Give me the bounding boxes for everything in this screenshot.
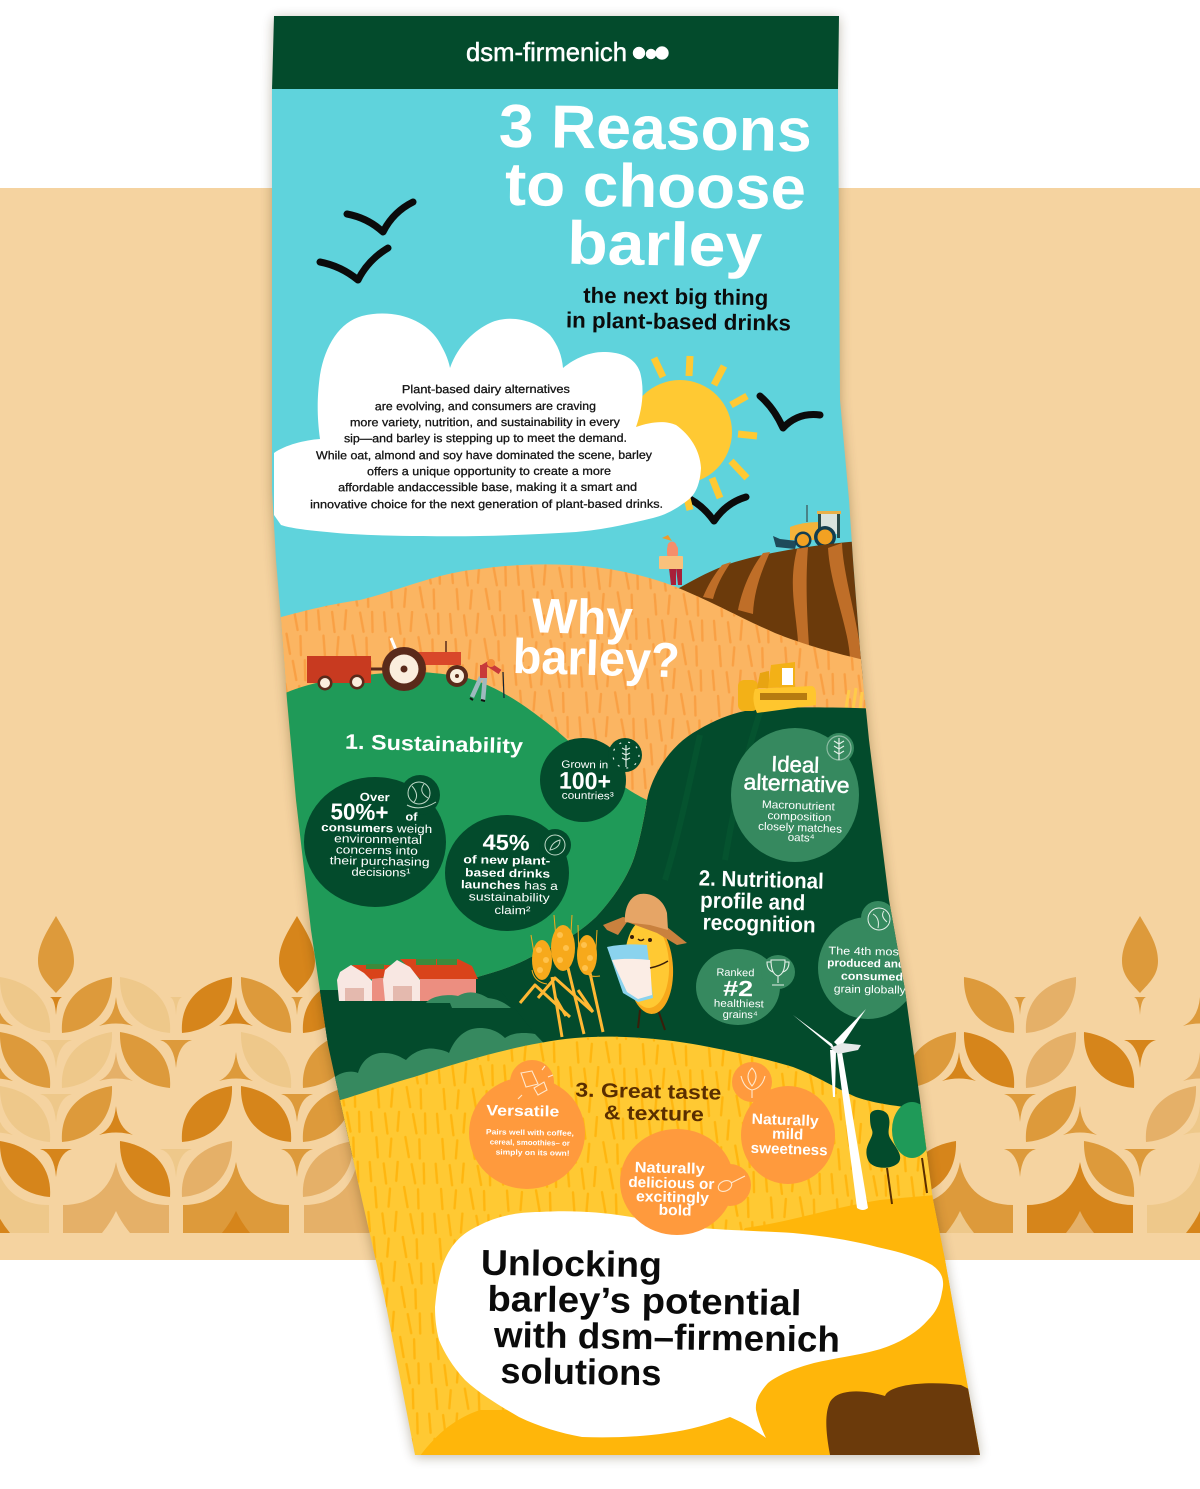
bubble text (750, 1111, 829, 1159)
icon: spoon (717, 1176, 745, 1193)
stat text: produced and (827, 957, 905, 971)
stat text: Grown in (561, 759, 609, 771)
shrubs by barn (426, 992, 511, 1008)
bubble text: mild (772, 1125, 803, 1144)
cloud with intro text (274, 313, 701, 536)
intro paragraph: Plant-based dairy alternatives (402, 384, 570, 396)
wheat tufts (846, 688, 868, 712)
subtitle (567, 286, 790, 332)
versatile text: Pairs well with coffee, (486, 1127, 574, 1138)
heading: 3. great taste and texture (575, 1079, 722, 1127)
versatile text: Versatile (486, 1102, 559, 1121)
character: barley grain with milk (603, 894, 687, 1030)
icon: farmer with crate (659, 535, 683, 585)
dark green hill (320, 707, 928, 1160)
icon: plant (741, 1068, 765, 1098)
subtitle: the next big thing (583, 283, 768, 310)
orange hill (270, 564, 900, 900)
icon: birds (320, 202, 820, 521)
icon: red tractor with trailer (307, 638, 468, 691)
stat text: oats⁴ (787, 832, 815, 845)
header bar (272, 16, 839, 89)
stat text: composition (767, 810, 832, 824)
intro paragraph: more variety, nutrition, and sustainability in every (350, 417, 620, 429)
bubble text: Naturally (634, 1159, 706, 1178)
stat text: Over (360, 792, 390, 804)
stat bubble: 100+ (540, 738, 642, 822)
closing message: barley’s potential (487, 1278, 802, 1323)
stat bubble: ideal alternative (731, 728, 859, 862)
green hill (270, 672, 647, 993)
stat text: countries³ (562, 790, 614, 803)
icon: wheat ear (827, 736, 851, 760)
icon: grain arrows (613, 742, 639, 768)
closing message: solutions (500, 1350, 662, 1393)
icon: globe in hand (407, 782, 436, 808)
stat text: grain globally (834, 983, 906, 997)
stat bubble: ranked #2 (696, 949, 795, 1025)
icon: trees (866, 1102, 932, 1204)
stat text: 45% (482, 830, 530, 855)
icon: yellow tractor (773, 505, 841, 549)
speech bubble (435, 1211, 943, 1438)
stat text: closely matches (758, 821, 843, 836)
bubble text: Naturally (751, 1111, 820, 1130)
title: to choose (505, 150, 807, 222)
icon: leaf (545, 835, 565, 855)
dark hill subtle stripes (665, 712, 760, 880)
bubble: naturally delicious (620, 1129, 751, 1235)
stat text: consumed (841, 971, 903, 984)
intro paragraph: offers a unique opportunity to create a more (367, 466, 611, 478)
closing message: Unlocking (481, 1242, 662, 1285)
stat text: Ideal (771, 751, 820, 778)
bubble text: excitingly (636, 1188, 710, 1207)
stat text: 50%+ (330, 798, 389, 825)
icon: trophy (767, 960, 789, 985)
stat text (714, 967, 765, 1021)
icon: barns (337, 959, 478, 1001)
icon: globe (868, 908, 890, 930)
heading: 2. nutritional profile and recognition (699, 870, 823, 936)
stat text: #2 (723, 976, 753, 1001)
closing message (479, 1242, 841, 1396)
bubble text: bold (658, 1202, 692, 1220)
icon: wheat stalks (520, 915, 603, 1037)
icon: puzzle pieces (518, 1066, 553, 1099)
stat bubble: 45% (445, 815, 571, 931)
bubble text (627, 1159, 715, 1220)
stat text: Ranked (716, 967, 755, 979)
bubble: naturally mild sweetness (732, 1062, 835, 1184)
stat bubble: 50%+ (304, 775, 446, 907)
stat text: consumers weigh (321, 822, 432, 836)
stat text: sustainability (469, 891, 550, 905)
stat text: of (405, 812, 418, 824)
bubble text: sweetness (750, 1140, 828, 1159)
stat text: 100+ (559, 768, 611, 795)
brown ploughed hill (672, 540, 870, 680)
intro paragraph: are evolving, and consumers are craving (375, 401, 596, 413)
stat text: environmental (334, 833, 422, 847)
intro paragraph (310, 384, 663, 511)
icon: farmer with stick (470, 659, 504, 701)
poster shadow (272, 18, 980, 1457)
heading: 3. great taste and texture: & texture (604, 1102, 704, 1126)
intro paragraph: While oat, almond and soy have dominated the scene, barley (316, 450, 652, 462)
stat text: based drinks (465, 867, 550, 881)
panel: poster (260, 10, 1000, 1470)
heading: 1. sustainability: 1. Sustainability (345, 731, 524, 758)
wheat pattern background (0, 916, 1200, 1233)
brown bush (826, 1383, 990, 1460)
versatile text (486, 1102, 574, 1158)
stat text: claim² (494, 905, 531, 917)
icon: wind turbine (793, 1009, 868, 1210)
heading: why barley (516, 598, 678, 686)
closing message: with dsm–firmenich (493, 1314, 840, 1360)
heading: 2. nutritional profile and recognition: profile and (700, 887, 806, 915)
intro paragraph: innovative choice for the next generation of plant-based drinks. (310, 499, 663, 511)
title: barley (567, 209, 763, 280)
subtitle: in plant-based drinks (566, 307, 791, 336)
heading: why barley: barley? (512, 630, 680, 688)
stat text: launches has a (461, 879, 559, 893)
stat text (462, 834, 558, 914)
title: 3 Reasons (498, 92, 812, 164)
logo: dsm-firmenich (466, 42, 669, 62)
heading: 2. nutritional profile and recognition: 2. Nutritional (698, 865, 824, 894)
stat text: The 4th most (828, 945, 903, 959)
intro paragraph: affordable andaccessible base, making it a smart and (338, 482, 637, 494)
bubble: versatile (469, 1060, 585, 1189)
icon: yellow bulldozer (738, 662, 816, 713)
background: peach band (0, 188, 1200, 1260)
title (497, 92, 812, 280)
stat text: of new plant- (463, 854, 551, 868)
versatile text: cereal, smoothies– or (490, 1137, 570, 1148)
lower dark band (320, 990, 338, 1040)
versatile text: simply on its own! (496, 1147, 570, 1158)
stat text: their purchasing (330, 855, 430, 869)
bubble text: delicious or (628, 1174, 715, 1193)
sky (260, 85, 880, 705)
stat text (320, 791, 433, 880)
stat text: healthiest (714, 998, 764, 1010)
heading: 2. nutritional profile and recognition: recognition (702, 910, 816, 937)
intro paragraph: sip—and barley is stepping up to meet the demand. (344, 433, 627, 445)
logo: dsm-firmenich: dsm-firmenich (466, 37, 627, 67)
stat text: alternative (743, 769, 850, 798)
heading: why barley: Why (531, 589, 634, 646)
stat text (744, 756, 849, 842)
stat text (827, 945, 907, 997)
stat bubble: 4th most produced (818, 901, 906, 1019)
stat text (560, 760, 614, 800)
heading: 3. great taste and texture: 3. Great taste (575, 1079, 722, 1105)
bushes (334, 1028, 560, 1115)
stat text: decisions¹ (351, 867, 411, 880)
icon: sun (628, 356, 757, 510)
stat text: concerns into (336, 844, 418, 858)
yellow field (320, 1037, 1000, 1470)
stat text: grains⁴ (723, 1009, 758, 1021)
stat text: Macronutrient (762, 799, 835, 813)
